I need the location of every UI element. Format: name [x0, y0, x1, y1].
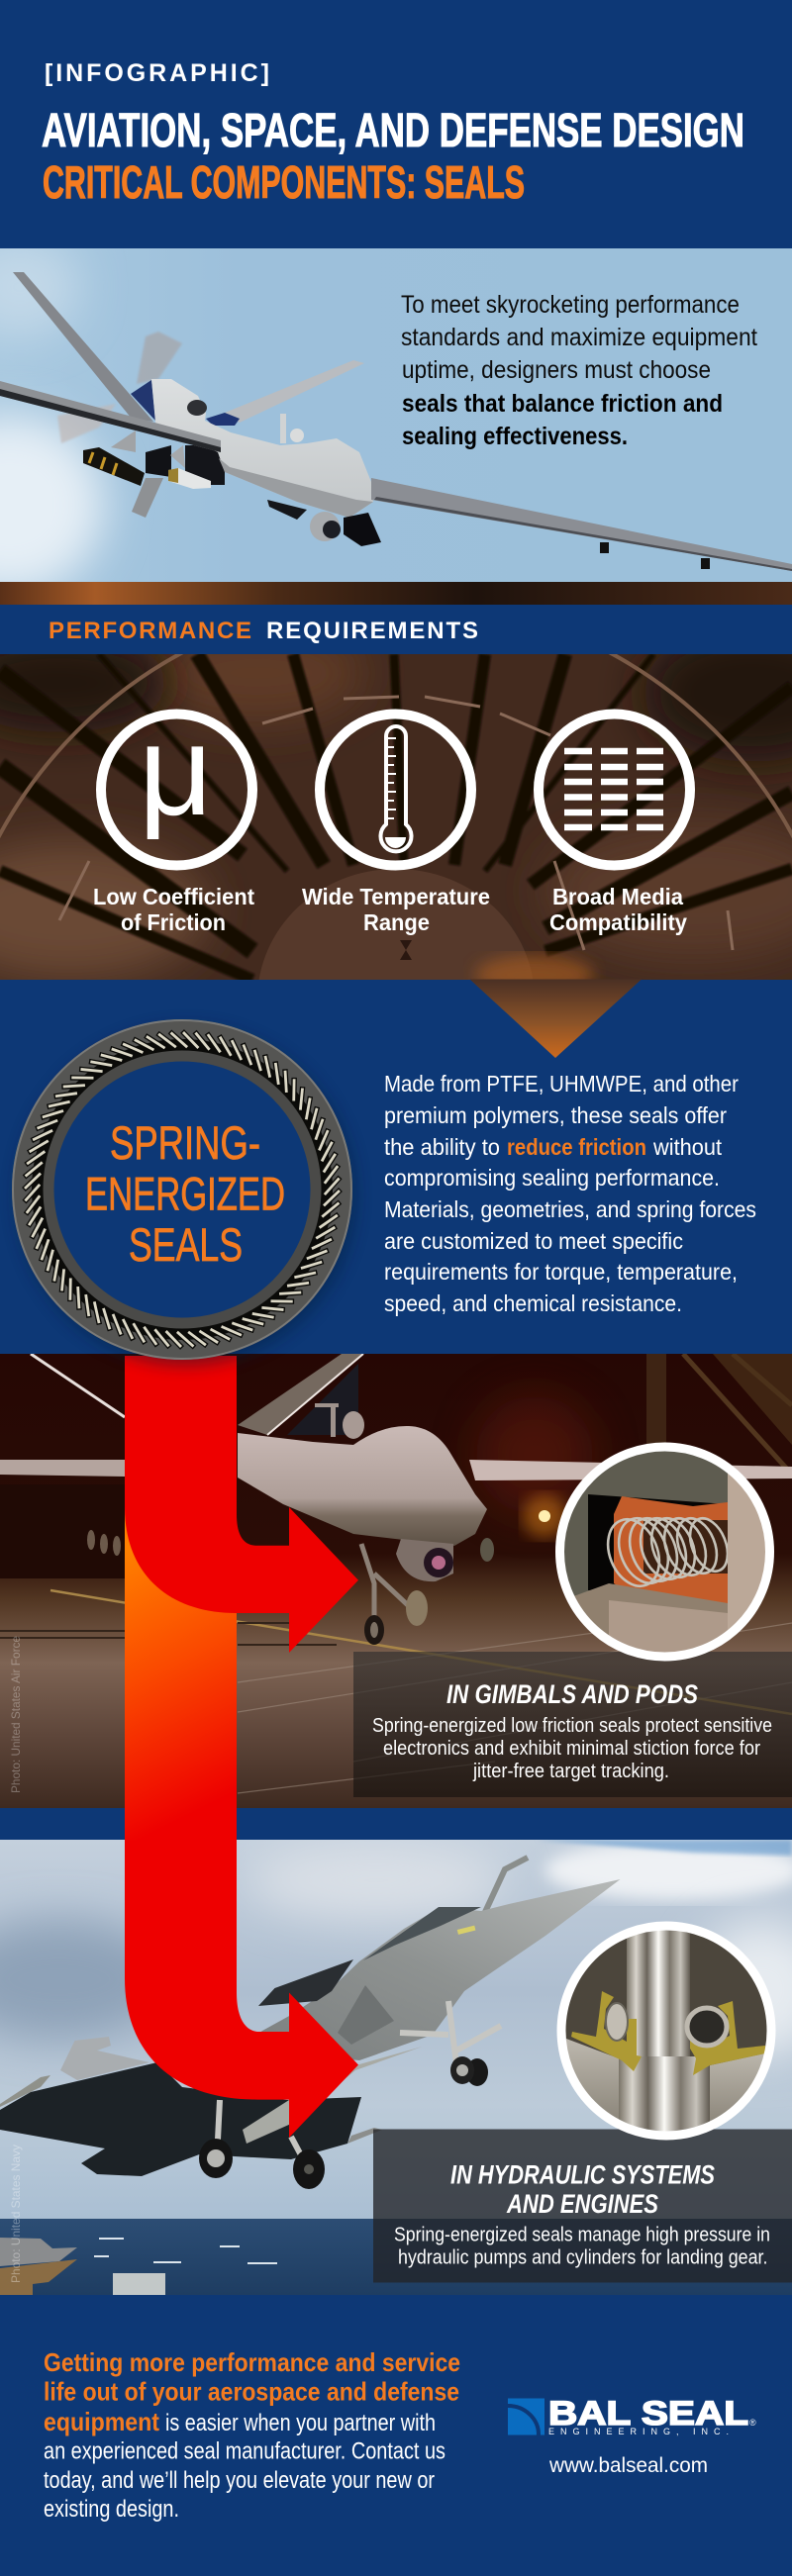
jet illustration	[0, 1858, 620, 2189]
seal title: ENERGIZED	[85, 1168, 285, 1219]
logo: Bal Seal: ENGINEERING, INC.	[548, 2427, 729, 2436]
panel: spring-energized description: reduce friction	[507, 1134, 646, 1160]
footer text: equipment	[44, 2407, 159, 2436]
caption box: hydraulic systems	[373, 2130, 792, 2282]
inset: spring seal in hydraulic system	[554, 1920, 778, 2147]
subtitle: CRITICAL COMPONENTS: SEALS	[43, 156, 525, 208]
panel: spring-energized description: compromising sealing performance.	[384, 1165, 720, 1191]
panel: spring-energized description: Made from PTFE, UHMWPE, and other	[384, 1071, 739, 1097]
section heading: performance requirements: PERFORMANCE	[49, 618, 251, 644]
caption: gimbals and pods: jitter-free target tracking.	[472, 1761, 669, 1782]
intro text: standards and maximize equipment	[401, 324, 757, 351]
icon: thermometer	[320, 715, 471, 865]
logo: Bal Seal	[508, 2395, 756, 2436]
label: wide temperature range: Range	[363, 909, 430, 935]
label: broad media compatibility: Compatibility	[549, 909, 687, 935]
drone illustration	[0, 272, 792, 571]
intro text	[401, 291, 757, 450]
panel: fighter jet photo	[0, 1840, 792, 2295]
label: broad media compatibility: Broad Media	[552, 884, 683, 909]
intro text: sealing effectiveness.	[402, 423, 628, 450]
seal title	[85, 1116, 285, 1271]
seal title: SEALS	[129, 1218, 243, 1271]
footer text: an experienced seal manufacturer. Contact us	[44, 2438, 446, 2464]
panel: spring-energized description: premium polymers, these seals offer	[384, 1102, 727, 1128]
label: wide temperature range	[302, 884, 490, 935]
caption: hydraulic systems and engines: IN HYDRAULIC SYSTEMS	[450, 2159, 715, 2189]
photo credit: Photo: United States Air Force	[9, 1636, 23, 1793]
inset: spring seal in gimbal	[554, 1442, 777, 1672]
label: low coefficient of friction	[93, 884, 254, 935]
footer text	[44, 2347, 460, 2523]
seal ring	[12, 1019, 356, 1366]
panel: drone on tarmac photo	[0, 1354, 792, 1808]
panel: turbine background	[0, 654, 792, 980]
icon: media lines	[539, 715, 690, 865]
arrow: upper branch	[125, 1356, 358, 1653]
logo: Bal Seal: BAL SEAL	[548, 2395, 748, 2433]
panel: spring-energized description: the ability to	[384, 1134, 500, 1160]
seal title: SPRING-	[110, 1116, 260, 1169]
panel: spring-energized description	[384, 1071, 756, 1316]
panel: drone in the sky	[0, 238, 792, 594]
logo mark	[508, 2399, 544, 2434]
section heading: performance requirements: REQUIREMENTS	[266, 618, 478, 644]
panel: spring-energized description: requirements for torque, temperature,	[384, 1259, 738, 1285]
caption box: gimbals and pods	[353, 1652, 792, 1797]
caption: gimbals and pods	[372, 1679, 772, 1782]
caption: gimbals and pods: IN GIMBALS AND PODS	[446, 1679, 698, 1709]
caption: gimbals and pods: electronics and exhibit minimal stiction force for	[383, 1738, 760, 1760]
panel: spring-energized description: without	[652, 1134, 723, 1160]
panel: spring-energized description: are customized to meet specific	[384, 1228, 683, 1254]
footer text: existing design.	[44, 2496, 179, 2523]
label: wide temperature range: Wide Temperature	[302, 884, 490, 909]
website: www.balseal.com	[548, 2454, 708, 2477]
intro text: To meet skyrocketing performance	[401, 291, 740, 319]
intro text: seals that balance friction and	[402, 390, 723, 418]
icon: friction coefficient: μ	[139, 698, 213, 842]
footer text: Getting more performance and service	[44, 2347, 460, 2377]
footer text: is easier when you partner with	[165, 2410, 436, 2436]
intro text: uptime, designers must choose	[402, 356, 711, 384]
section heading: performance requirements	[49, 618, 478, 644]
label: low coefficient of friction: Low Coefficient	[93, 884, 254, 909]
footer text: life out of your aerospace and defense	[44, 2377, 459, 2407]
caption: hydraulic systems and engines: AND ENGINES	[506, 2189, 658, 2219]
panel: spring-energized description: speed, and chemical resistance.	[384, 1290, 682, 1316]
header	[42, 59, 744, 208]
drone illustration	[0, 1354, 792, 1645]
footer text: today, and we’ll help you elevate your new or	[44, 2467, 435, 2494]
icon: friction coefficient	[101, 698, 252, 865]
pointer: triangle below turbine	[469, 980, 642, 1058]
strip: turbine photo band	[0, 582, 792, 605]
label: broad media compatibility	[549, 884, 687, 935]
photo credit: Photo: United States Navy	[9, 2145, 23, 2283]
label: low coefficient of friction: of Friction	[121, 909, 226, 935]
ship deck	[0, 2238, 165, 2295]
eyebrow: infographic tag: [INFOGRAPHIC]	[45, 59, 269, 87]
caption: hydraulic systems and engines	[394, 2159, 770, 2268]
logo: Bal Seal: ®	[749, 2418, 756, 2428]
arrow: trunk to lower branch	[125, 1484, 358, 2138]
panel: spring-energized description: Materials, geometries, and spring forces	[384, 1196, 756, 1222]
